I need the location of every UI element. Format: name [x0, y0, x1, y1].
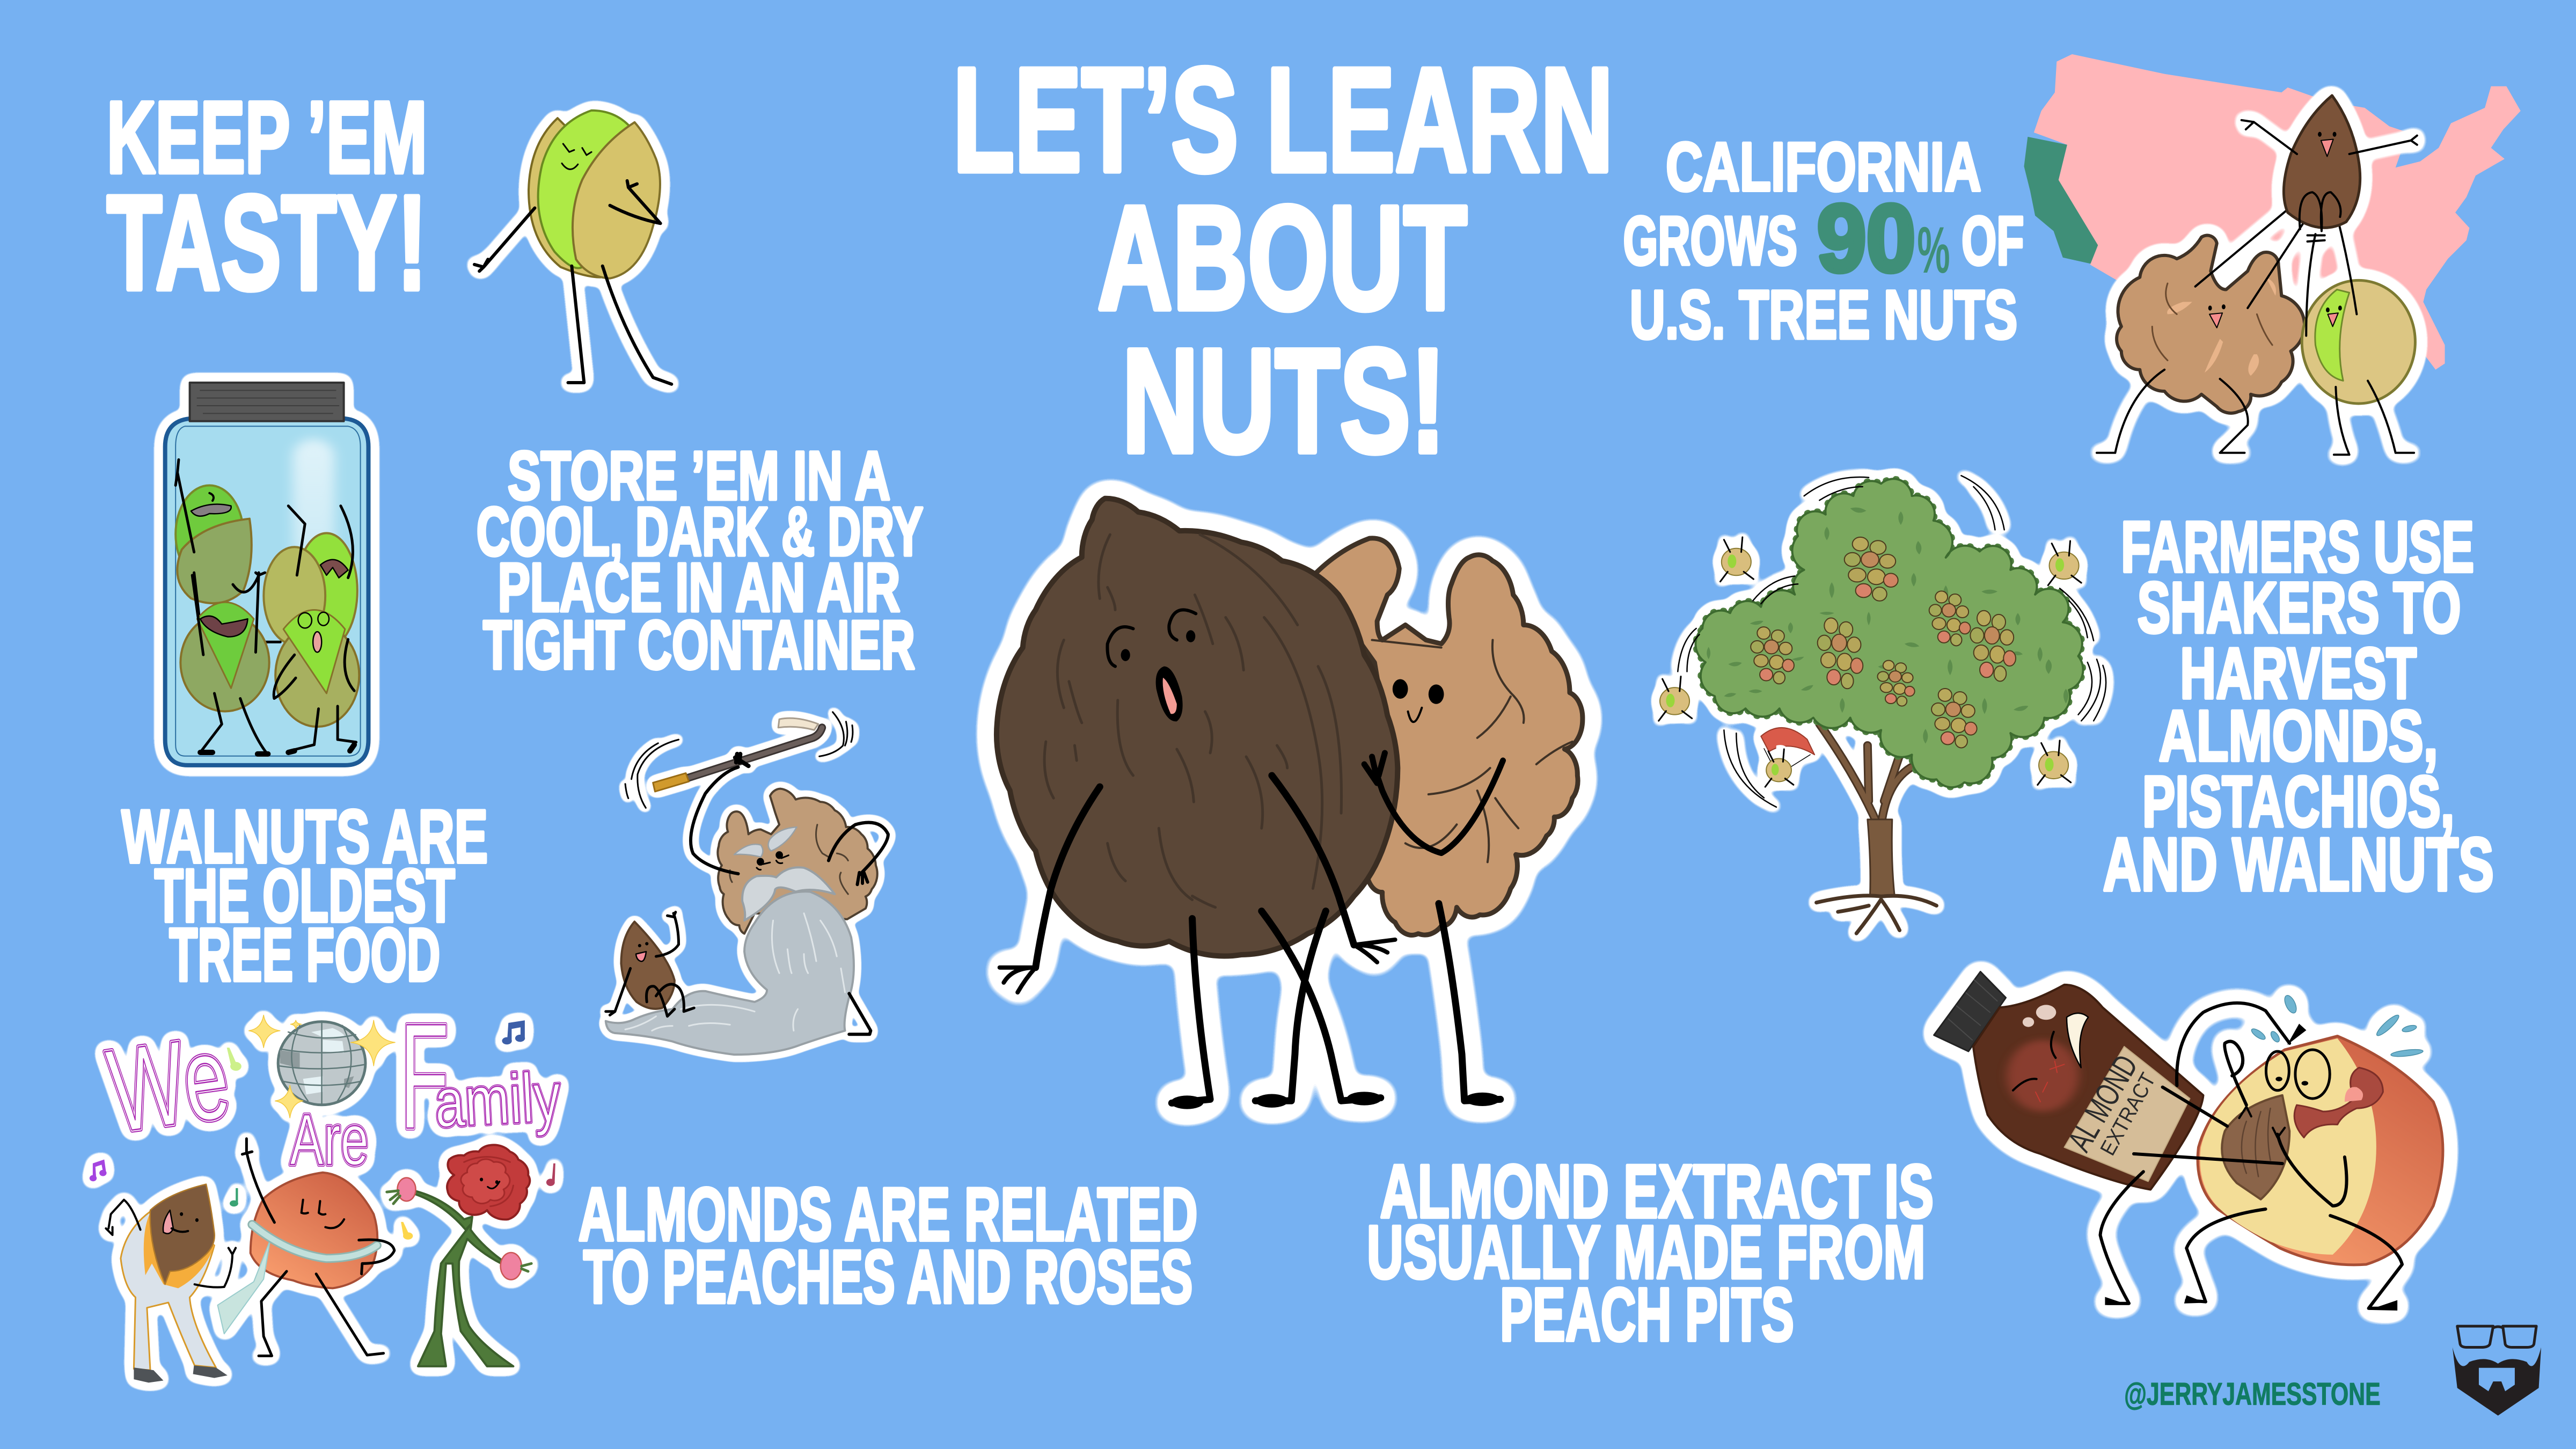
bottle highlights	[2023, 1005, 2088, 1067]
text: almond extract from peach pits: ALMOND EXTRACT IS	[1380, 1149, 1934, 1233]
logo mouth	[2479, 1368, 2515, 1391]
peach dancer	[217, 1139, 394, 1356]
jar highlight	[292, 439, 334, 588]
text: storage tip	[477, 438, 923, 684]
sticker: We Are Family disco trio	[90, 993, 562, 1382]
text: walnuts oldest tree food: TREE FOOD	[169, 913, 440, 997]
logo beard	[2453, 1348, 2541, 1416]
sticker: old walnut with cane and almond on beard	[606, 712, 888, 1055]
text: storage tip: STORE ’EM IN A	[508, 438, 890, 515]
sticker: three nuts celebrating on the map	[2097, 96, 2417, 455]
lettering: We Are Family: We	[100, 1010, 237, 1158]
heading: keep 'em tasty: TASTY!	[107, 168, 427, 318]
eyes	[757, 851, 788, 870]
pistachio right	[264, 506, 357, 648]
falling pistachios	[1659, 537, 2081, 785]
bottle label text: AL MOND	[2061, 1049, 2145, 1158]
kernel leg and arm	[1439, 904, 1501, 1101]
sticker: happy pistachio	[474, 111, 671, 384]
shell face	[1107, 610, 1196, 721]
pistachio arms and legs	[474, 181, 671, 384]
logo: bearded face with glasses	[2453, 1326, 2541, 1416]
map: lower 48 states	[2034, 54, 2521, 370]
lettering: We Are Family: Are	[290, 1099, 369, 1180]
text: walnuts oldest tree food	[122, 794, 488, 997]
disco ball	[278, 1022, 365, 1105]
almond riding the beard	[606, 912, 694, 1016]
credit handle: @JERRYJAMESSTONE	[2124, 1377, 2381, 1411]
bottle label	[2064, 1046, 2190, 1181]
bottle blush	[2007, 1040, 2079, 1111]
heading: keep 'em tasty	[107, 80, 427, 318]
text: California grows 90%: OF	[1962, 203, 2024, 280]
pistachio top left	[175, 460, 265, 652]
map: United States with California highlighted	[2024, 54, 2521, 370]
walnut creases	[730, 825, 848, 894]
shell creases	[1044, 535, 1342, 908]
tree crown edge leaves	[1695, 479, 2083, 787]
bottle label text	[2061, 1049, 2160, 1159]
bottle cap	[1934, 972, 2006, 1051]
jar body	[165, 419, 369, 765]
almond on top	[2242, 96, 2417, 241]
tree trunk and roots	[1817, 724, 1936, 933]
logo glasses	[2457, 1326, 2536, 1348]
almond clusters on the tree	[1751, 537, 2016, 748]
lettering: We Are Family: F	[400, 993, 449, 1160]
bottle scratches	[2036, 1061, 2064, 1102]
text: farmers use shakers	[2103, 506, 2494, 906]
text: farmers use shakers: ALMONDS,	[2158, 695, 2438, 776]
title: ABOUT	[1097, 176, 1467, 341]
sticker: screaming pistachios in a glass jar	[165, 383, 369, 765]
cane motion lines	[625, 712, 853, 808]
walnut kernel	[718, 789, 877, 934]
text: California grows 90%: GROWS	[1623, 203, 1797, 280]
peach shocked face	[2266, 1050, 2383, 1138]
map: California	[2024, 137, 2098, 264]
walnut shell body	[997, 499, 1397, 956]
text: walnuts oldest tree food: WALNUTS ARE	[122, 794, 488, 879]
text: storage tip: COOL, DARK & DRY	[477, 494, 923, 570]
almond goat	[106, 1184, 236, 1382]
text: almond extract from peach pits: USUALLY MADE FROM	[1367, 1210, 1926, 1294]
pistachio bottom right	[274, 610, 359, 751]
eyebrows	[734, 827, 797, 857]
tree crown	[1695, 479, 2083, 787]
text: walnuts oldest tree food: THE OLDEST	[155, 853, 455, 938]
parachuting pistachio	[1761, 728, 1814, 787]
pistachio bottom left	[180, 573, 269, 752]
kernel arm reaching across	[1364, 753, 1503, 853]
sticker: almond extract bottle and peach	[1934, 972, 2443, 1311]
bottle body	[1973, 985, 2203, 1190]
pistachio	[2302, 280, 2415, 455]
text: storage tip: TIGHT CONTAINER	[483, 607, 915, 684]
shell arms and legs	[1036, 775, 1381, 1103]
sticker: walnut shell and walnut kernel friends	[997, 499, 1583, 1109]
text: California grows 90%	[1623, 129, 2024, 354]
text: almonds related to peaches and roses	[579, 1172, 1198, 1319]
walnut arms, hand and leg	[691, 767, 888, 1034]
beard strands	[625, 913, 845, 1030]
walnut kernel	[2097, 236, 2304, 453]
jar lid	[190, 383, 344, 421]
shell fingers	[1000, 940, 1395, 992]
text: California grows 90%: CALIFORNIA	[1666, 129, 1981, 206]
jar feet	[200, 745, 354, 754]
bottle face	[2013, 1032, 2055, 1091]
heading: keep 'em tasty: KEEP ’EM	[107, 80, 427, 194]
cane	[653, 718, 822, 792]
limbs	[2100, 1003, 2402, 1308]
text: farmers use shakers: HARVEST	[2180, 633, 2417, 714]
feet	[1170, 1092, 1500, 1109]
sweat drops	[2249, 994, 2424, 1058]
pistachio face	[562, 144, 591, 169]
text: almonds related to peaches and roses: TO PEACHES AND ROSES	[583, 1235, 1192, 1319]
lettering: We Are Family	[100, 993, 562, 1180]
text: storage tip: PLACE IN AN AIR	[498, 550, 901, 626]
music notes	[90, 1020, 555, 1240]
kernel creases	[1372, 640, 1572, 862]
title: LET’S LEARN	[953, 38, 1613, 202]
text: California grows 90%: U.S. TREE NUTS	[1630, 277, 2017, 354]
pistachio shell and kernel	[529, 111, 660, 279]
text: almonds related to peaches and roses: ALMONDS ARE RELATED	[579, 1172, 1198, 1256]
peach	[2198, 1036, 2443, 1265]
text: almond extract from peach pits: PEACH PITS	[1500, 1272, 1794, 1357]
shaking motion lines	[1678, 475, 2106, 807]
sparkles	[249, 1015, 395, 1118]
sticker: shaking tree with falling pistachios	[1659, 475, 2106, 933]
title: NUTS!	[1122, 319, 1446, 484]
moustache	[742, 867, 835, 920]
bottle label text: EXTRACT	[2096, 1069, 2160, 1159]
tree leaves	[1707, 508, 2068, 744]
long grey beard	[606, 891, 854, 1055]
walnut kernel	[1313, 538, 1583, 935]
rose dancer	[387, 1145, 531, 1366]
lifting arms	[2196, 209, 2357, 336]
lettering: We Are Family: amily	[433, 1057, 562, 1142]
text: California grows 90%: 90	[1817, 185, 1915, 291]
title	[953, 38, 1613, 484]
kernel face	[1393, 679, 1444, 722]
text: almond extract from peach pits	[1367, 1149, 1934, 1357]
text: California grows 90%: %	[1917, 213, 1950, 287]
